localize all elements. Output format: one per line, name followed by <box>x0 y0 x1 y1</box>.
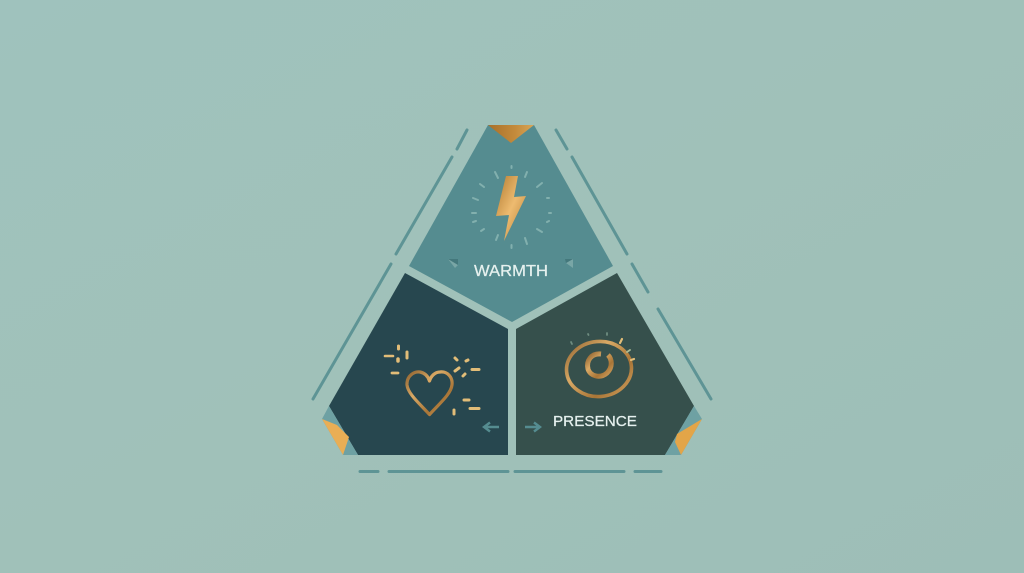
icon: right arrow <box>525 422 540 432</box>
icon: eye rays <box>571 333 634 360</box>
icon: heart sparks <box>385 346 479 414</box>
icon: lightning bolt <box>496 176 526 241</box>
panel: heart <box>322 273 508 455</box>
panel: warmth <box>409 125 613 322</box>
icon: eye inner ring <box>588 354 611 376</box>
icon: small right diamond <box>565 259 573 268</box>
label: warmth: WARMTH <box>474 263 548 280</box>
icon: eye outer ring <box>564 339 634 399</box>
label: presence: PRESENCE <box>553 413 637 430</box>
icon: left arrow <box>484 422 499 432</box>
icon: heart <box>407 372 452 414</box>
outer dashed outline <box>313 130 711 472</box>
icon: bottom right corner <box>665 406 702 455</box>
icon: bottom left corner <box>322 406 358 455</box>
icon: small left diamond <box>448 259 458 268</box>
icon: top gold corner <box>488 125 534 143</box>
panel: presence <box>516 273 702 455</box>
icon: radiating ticks <box>472 166 551 248</box>
